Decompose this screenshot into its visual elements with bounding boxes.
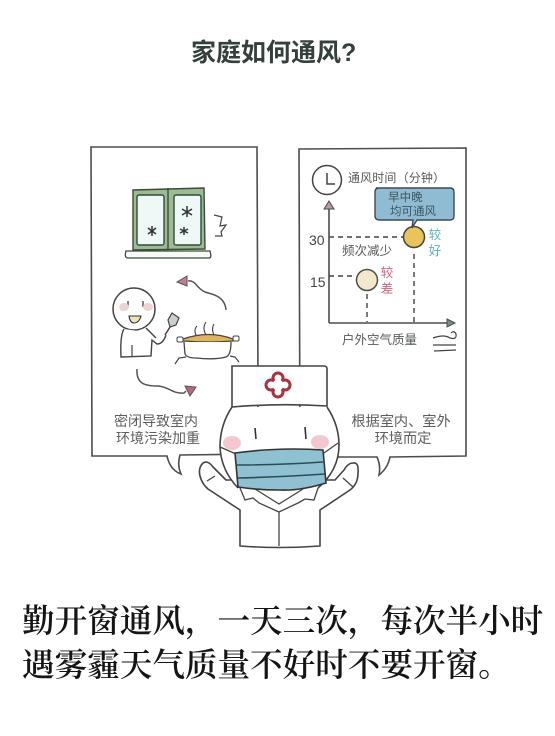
callout: morning noon evening (375, 188, 454, 228)
icon: steaming pot (175, 322, 239, 364)
icon: clock (312, 166, 342, 194)
arrow: air moving down (137, 369, 196, 396)
y tick 30: 30 (309, 232, 325, 248)
mask straps (220, 443, 338, 454)
caption: closed room: 密闭导致室内 (114, 413, 198, 429)
label: poor: 较 (381, 265, 394, 280)
hat (232, 366, 327, 407)
panel: closed room (91, 147, 258, 474)
label: poor: 差 (381, 282, 393, 296)
mask folds (237, 462, 325, 478)
panel outline with speech tail (299, 148, 466, 475)
message line 2: 遇雾霾天气质量不好时不要开窗。 (22, 647, 511, 684)
icon: closed window (125, 188, 226, 258)
message line 1: 勤开窗通风，一天三次，每次半小时 (22, 603, 543, 640)
data point: good air quality (404, 226, 424, 248)
doctor character (199, 366, 358, 548)
doctor coat and arms (199, 462, 358, 548)
mask (235, 449, 326, 490)
axis label: outdoor air quality: 户外空气质量 (342, 332, 417, 347)
caption: closed room: 环境污染加重 (116, 430, 200, 446)
chart: time vs outdoor air quality (309, 201, 455, 327)
axis title: ventilation time: 通风时间（分钟） (348, 170, 445, 185)
head outline (220, 407, 339, 488)
message text (22, 603, 543, 684)
panel: ventilation chart (299, 148, 466, 475)
callout: morning noon evening: 早中晚 (388, 191, 423, 204)
cheeks (223, 436, 241, 450)
y tick 15: 15 (310, 274, 326, 290)
head (220, 407, 339, 488)
title: 家庭如何通风? (191, 38, 356, 67)
label: good: 好 (429, 244, 441, 258)
data point: poor air quality (356, 270, 378, 290)
label: good: 较 (429, 227, 442, 242)
icon: red cross (266, 373, 290, 397)
eyes (255, 427, 306, 439)
callout: morning noon evening: 均可通风 (390, 205, 436, 218)
panel outline with speech tail (91, 147, 258, 474)
caption: depends on environment: 根据室内、室外 (351, 413, 451, 430)
collar (240, 488, 318, 546)
arrow: air moving up (177, 276, 226, 310)
caption: depends on environment: 环境而定 (375, 430, 431, 447)
icon: wind (433, 332, 456, 351)
label: less frequent: 频次减少 (342, 244, 392, 258)
icon: person cooking (113, 288, 179, 357)
cuffs (207, 476, 353, 487)
